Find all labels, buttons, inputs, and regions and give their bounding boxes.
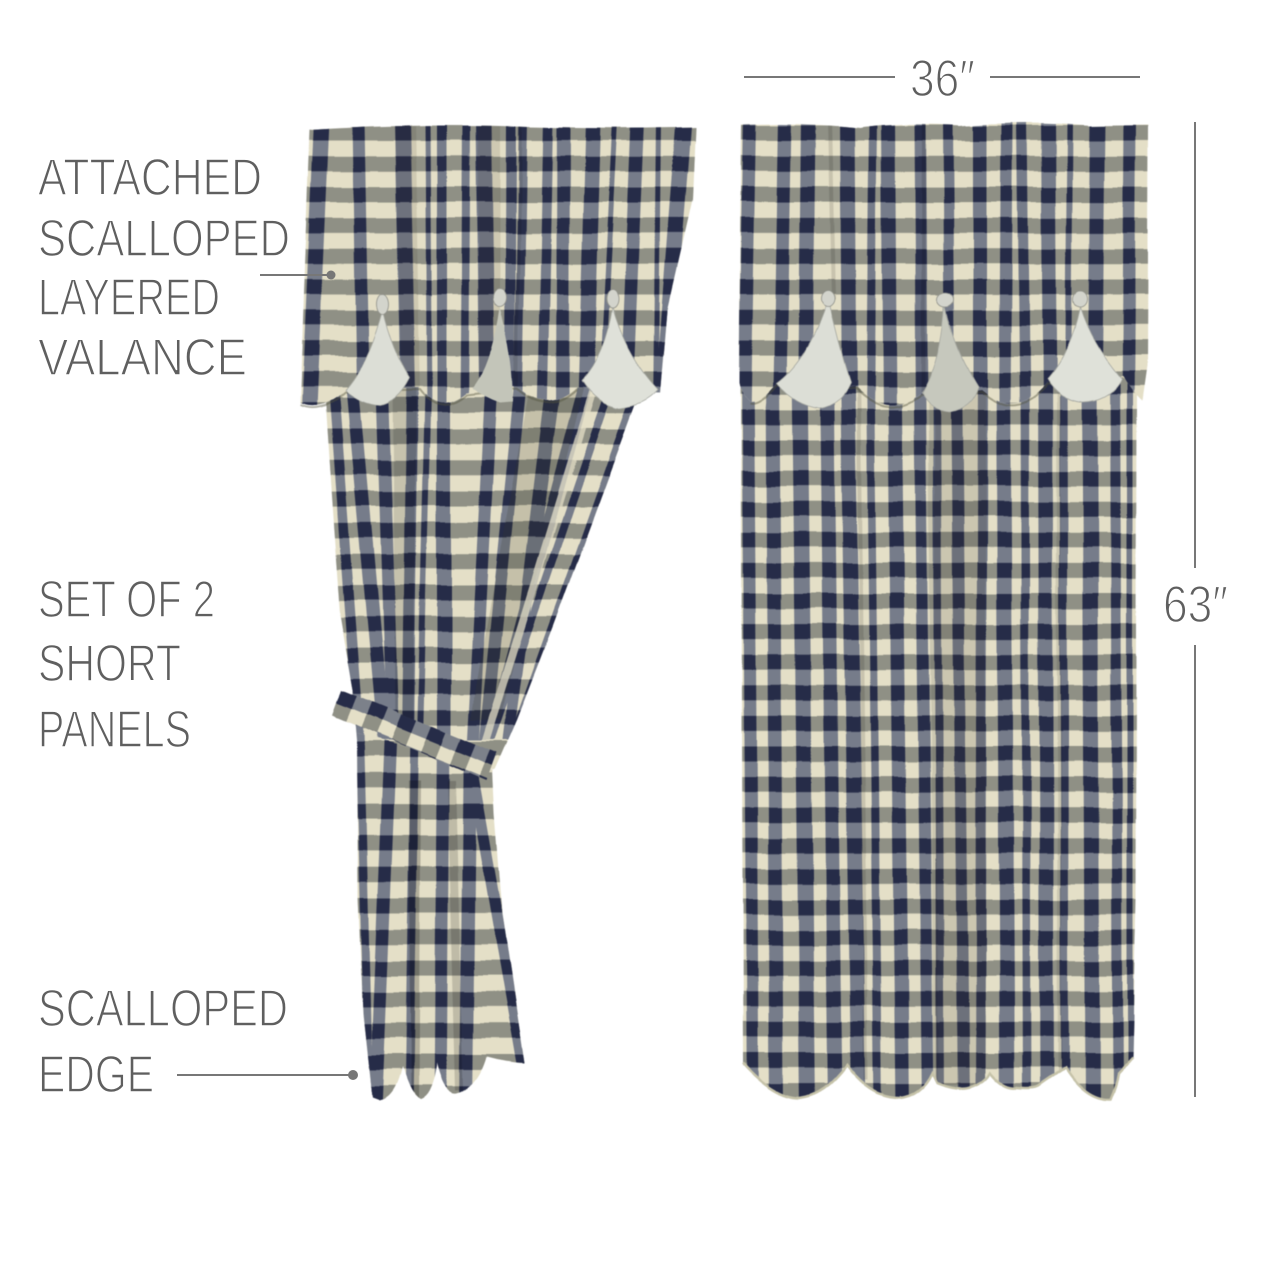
right valance scalloped tab 2 xyxy=(922,303,978,412)
left valance hem shadow xyxy=(300,389,577,408)
left tie-back band xyxy=(333,690,497,780)
label: set of 2 short panels: SHORT xyxy=(38,635,181,693)
left valance scalloped tab 1 xyxy=(345,310,410,405)
right valance scalloped tab 1 xyxy=(777,300,850,408)
label: attached scalloped layered valance: VALANCE xyxy=(38,329,247,387)
label: scalloped edge: EDGE xyxy=(38,1046,154,1104)
right curtain scalloped hem xyxy=(743,1058,1132,1099)
right curtain body xyxy=(735,365,1145,1110)
right valance xyxy=(735,118,1153,420)
diagonal fold highlight xyxy=(482,390,595,740)
width dimension: 36 inches: 36″ xyxy=(910,50,975,108)
left valance scalloped tab 3 xyxy=(582,307,658,408)
callout leader: scalloped edge xyxy=(177,1070,358,1080)
left valance buttons xyxy=(377,289,618,314)
left panel upper body xyxy=(326,386,635,770)
callout leader: valance xyxy=(260,270,336,280)
label: set of 2 short panels: PANELS xyxy=(38,701,191,759)
height dimension: 63 inches: 63″ xyxy=(1163,576,1228,634)
label: attached scalloped layered valance: LAYERED xyxy=(38,269,220,327)
right valance buttons xyxy=(821,291,1087,307)
right valance hem shadow xyxy=(750,379,1123,407)
left valance xyxy=(295,120,700,420)
label: attached scalloped layered valance: ATTACHED xyxy=(38,149,262,207)
pleat shading xyxy=(392,387,416,718)
left panel lower gathered body xyxy=(356,734,526,1101)
label: scalloped edge xyxy=(38,980,288,1104)
label: attached scalloped layered valance xyxy=(38,149,290,387)
right valance scalloped tab 3 xyxy=(1047,307,1122,403)
label: attached scalloped layered valance: SCALLOPED xyxy=(38,210,290,268)
label: set of 2 short panels xyxy=(38,571,215,759)
label: scalloped edge: SCALLOPED xyxy=(38,980,288,1038)
left curtain tied back xyxy=(295,118,1153,1110)
left valance scalloped tab 2 xyxy=(473,307,513,403)
label: set of 2 short panels: SET OF 2 xyxy=(38,571,215,629)
